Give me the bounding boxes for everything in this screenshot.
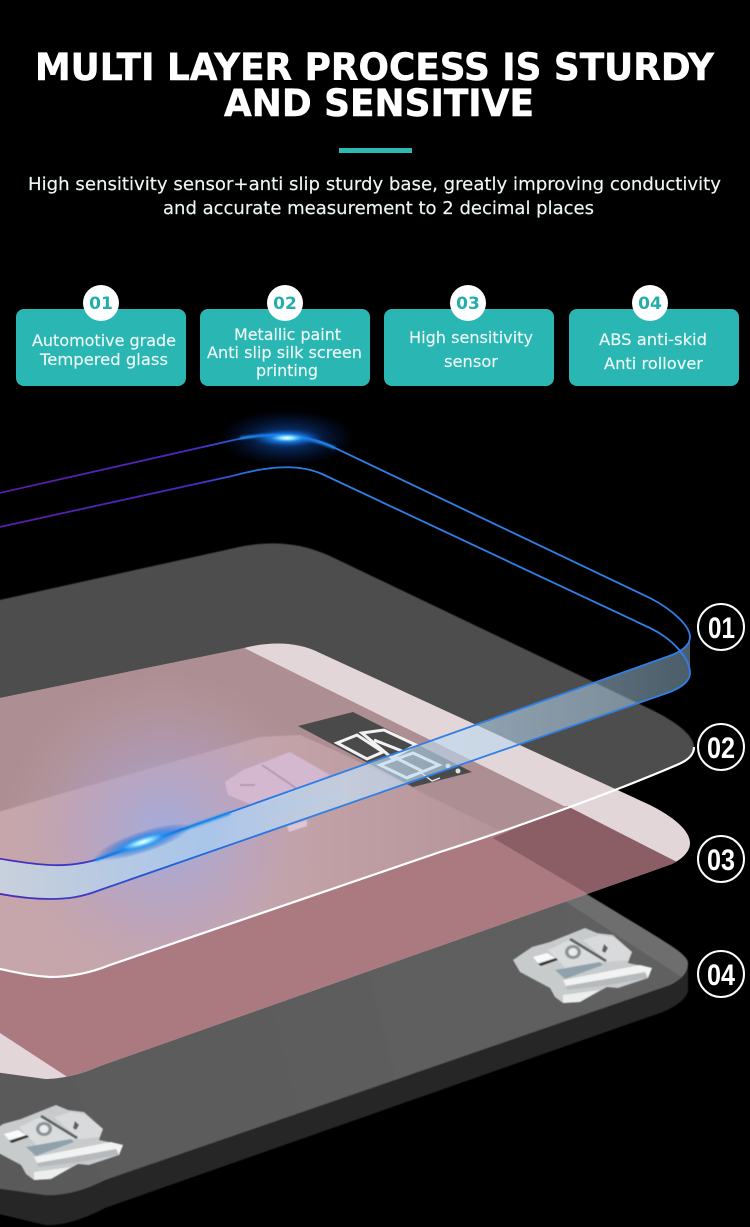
panel: feature card 02: printing (256, 361, 318, 380)
icon: metal sensor clip left (0, 1105, 123, 1180)
title: AND SENSITIVE (224, 82, 534, 125)
subtitle text (28, 174, 721, 219)
panel: feature card 04: 04 (638, 294, 662, 314)
panel: feature card 04: ABS anti-skid (599, 330, 707, 349)
glow: top highlight (219, 410, 355, 466)
faint sensor clip seen through the film (225, 752, 345, 832)
layer label 03 (698, 836, 744, 882)
teal title divider (339, 148, 412, 153)
panel: feature card 02: Metallic paint (234, 325, 341, 344)
panel: feature card 01: 01 (89, 294, 113, 314)
layer 03: sensor film (0, 630, 705, 1090)
panel: feature card 03 (384, 285, 554, 386)
panel: feature card 01: Tempered glass (39, 350, 168, 369)
layer label 01 (698, 604, 744, 650)
panel: feature card 03: 03 (456, 294, 480, 314)
panel: feature card 02 (200, 285, 370, 386)
layer label 01: 01 (708, 612, 735, 645)
panel: feature card 03: High sensitivity (409, 328, 533, 347)
layer 04: anti-skid base plate (0, 894, 689, 1226)
panel: feature card 04 (569, 285, 739, 386)
panel: feature card 01 (16, 285, 186, 386)
glow: lower highlight (92, 813, 230, 868)
layer label 04: 04 (707, 959, 735, 992)
layer label 02: 02 (707, 732, 735, 765)
layer label 04 (698, 951, 744, 997)
layer 02 white lower edge (0, 747, 694, 977)
icon: metal sensor clip right (513, 928, 652, 1003)
title (35, 46, 715, 125)
layer label 02 (698, 724, 744, 770)
subtitle text: High sensitivity sensor+anti slip sturdy base, greatly improving conductivity (28, 174, 721, 195)
panel: feature card 01: Automotive grade (32, 331, 176, 350)
panel: feature card 02: 02 (273, 294, 297, 314)
panel: feature card 03: sensor (444, 352, 498, 371)
layer label 03: 03 (707, 844, 735, 877)
panel: feature card 02: Anti slip silk screen (207, 343, 362, 362)
layer 02: printed panel (0, 543, 694, 977)
panel: feature card 04: Anti rollover (604, 354, 703, 373)
layer 01: tempered glass (0, 435, 690, 899)
panel: digital display (298, 712, 472, 787)
title: MULTI LAYER PROCESS IS STURDY (35, 46, 715, 89)
subtitle text: and accurate measurement to 2 decimal places (163, 198, 594, 219)
